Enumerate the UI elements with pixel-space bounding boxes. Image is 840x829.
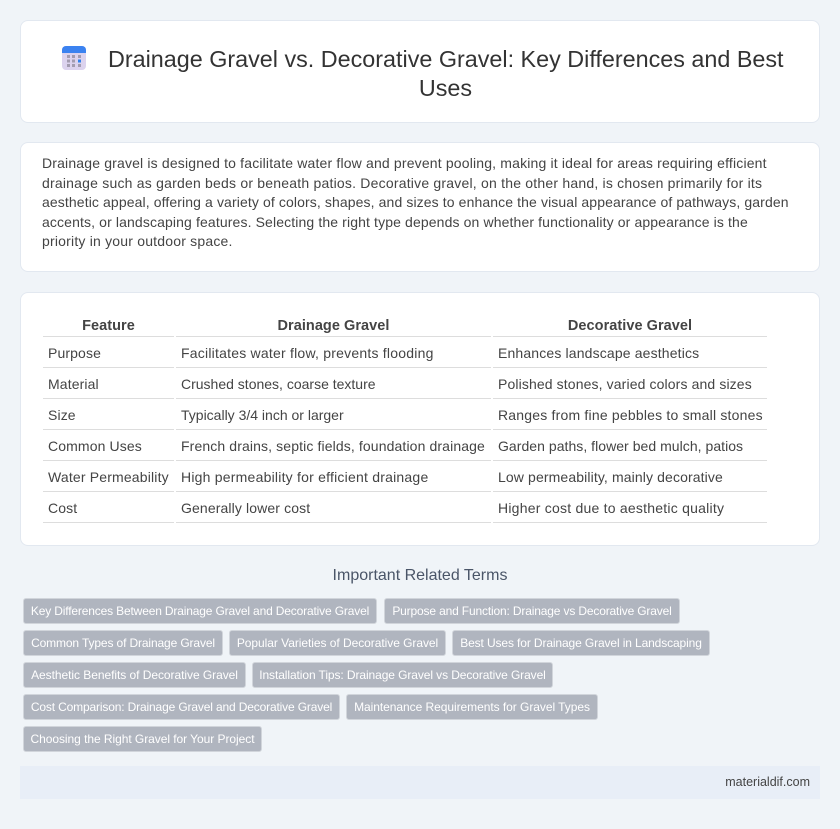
tag xyxy=(452,630,710,656)
row: size: Size xyxy=(48,407,76,423)
tag xyxy=(346,694,598,720)
row: purpose: Facilitates water flow, prevents flooding xyxy=(181,345,434,361)
tag xyxy=(23,694,340,720)
tag xyxy=(252,662,553,688)
row: size xyxy=(48,407,763,423)
table header: Feature xyxy=(82,318,135,334)
row: material xyxy=(48,376,752,392)
row: water permeability xyxy=(48,469,723,485)
tag: Aesthetic Benefits of Decorative Gravel xyxy=(31,668,238,682)
text block: introduction xyxy=(42,155,789,249)
row: size: Ranges from fine pebbles to small stones xyxy=(498,407,763,423)
tag: Purpose and Function: Drainage vs Decorative Gravel xyxy=(392,604,672,618)
row: common uses xyxy=(48,438,743,454)
title xyxy=(108,46,784,100)
tag xyxy=(229,630,446,656)
text block: introduction: accents, or landscaping features. Selecting the right type depends on whether functionality or appearance is the xyxy=(42,214,748,230)
tag: Installation Tips: Drainage Gravel vs Decorative Gravel xyxy=(259,668,546,682)
footer bar xyxy=(20,766,820,799)
panel: comparison table xyxy=(20,292,820,546)
row: purpose: Enhances landscape aesthetics xyxy=(498,345,699,361)
text block: introduction: Drainage gravel is designed to facilitate water flow and prevent pooling, making it ideal for areas requiring efficient xyxy=(42,155,767,171)
text block: introduction: aesthetic appeal, offering a variety of colors, shapes, and sizes to enhance the visual appearance of pathways, garden xyxy=(42,194,789,210)
row: purpose xyxy=(48,345,699,361)
row: cost xyxy=(48,500,724,516)
tag: Choosing the Right Gravel for Your Project xyxy=(30,732,255,746)
tag xyxy=(23,726,262,752)
text block: introduction: priority in your outdoor space. xyxy=(42,233,233,249)
tag xyxy=(23,598,377,624)
tag xyxy=(23,662,246,688)
tag: Common Types of Drainage Gravel xyxy=(31,636,215,650)
title: Uses xyxy=(419,74,472,100)
row: material: Polished stones, varied colors and sizes xyxy=(498,376,752,392)
row: material: Crushed stones, coarse texture xyxy=(181,376,376,392)
row: water permeability: High permeability for efficient drainage xyxy=(181,469,428,485)
row: purpose: Purpose xyxy=(48,345,101,361)
row: size: Typically 3/4 inch or larger xyxy=(181,407,344,423)
tag: Popular Varieties of Decorative Gravel xyxy=(237,636,438,650)
row: cost: Higher cost due to aesthetic quality xyxy=(498,500,724,516)
tag xyxy=(384,598,680,624)
row: cost: Cost xyxy=(48,500,77,516)
row: water permeability: Low permeability, mainly decorative xyxy=(498,469,723,485)
row: water permeability: Water Permeability xyxy=(48,469,169,485)
tag xyxy=(23,630,223,656)
row: cost: Generally lower cost xyxy=(181,500,310,516)
panel: introduction xyxy=(20,142,820,272)
row: common uses: French drains, septic fields, foundation drainage xyxy=(181,438,485,454)
tag list: related terms xyxy=(23,598,710,752)
tag: Key Differences Between Drainage Gravel and Decorative Gravel xyxy=(31,604,369,618)
row: material: Material xyxy=(48,376,99,392)
heading: related terms: Important Related Terms xyxy=(333,566,507,584)
table header: Decorative Gravel xyxy=(568,318,692,334)
icon: calendar grid xyxy=(62,46,86,70)
tag: Cost Comparison: Drainage Gravel and Decorative Gravel xyxy=(31,700,332,714)
tag: Best Uses for Drainage Gravel in Landscaping xyxy=(460,636,702,650)
row: common uses: Garden paths, flower bed mulch, patios xyxy=(498,438,743,454)
text block: introduction: drainage such as garden beds or beneath patios. Decorative gravel, on the other hand, is chosen primarily for its xyxy=(42,174,762,190)
table header xyxy=(82,318,692,334)
panel: title header xyxy=(20,20,820,123)
table header: Drainage Gravel xyxy=(278,318,389,334)
footer source: materialdif.com xyxy=(725,775,810,789)
title: Drainage Gravel vs. Decorative Gravel: Key Differences and Best xyxy=(108,46,784,72)
tag: Maintenance Requirements for Gravel Types xyxy=(354,700,590,714)
row: common uses: Common Uses xyxy=(48,438,142,454)
